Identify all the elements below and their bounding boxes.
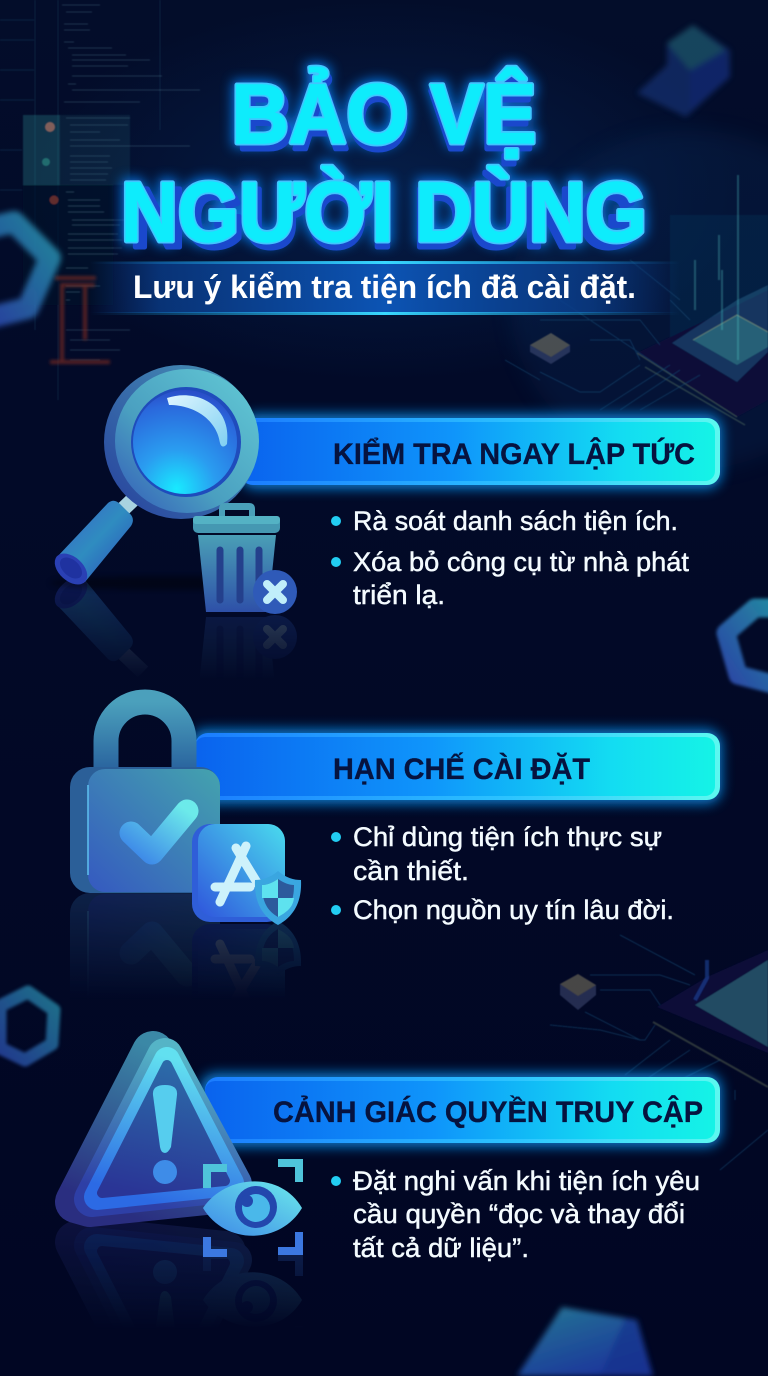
bullet list [331,506,690,610]
banner [190,729,722,804]
panel: cảnh giác quyền truy cập [76,1052,722,1376]
bullet list: triển lạ. [353,580,445,610]
title glow: NGƯỜI DÙNG [121,165,647,259]
decoration: left hexagon top [0,222,50,318]
decoration: top-right cube [637,25,730,117]
bullet list: Xóa bỏ công cụ từ nhà phát [353,547,690,577]
bullet list: Đặt nghi vấn khi tiện ích yêu [353,1166,700,1196]
icon: warning triangle [76,1052,234,1206]
title extrusion: NGƯỜI DÙNG [130,171,638,265]
title glow: BẢO VỆ [232,67,536,161]
title face: NGƯỜI DÙNG [121,165,647,259]
heading: HẠN CHẾ CÀI ĐẶT [333,752,590,786]
banner [200,1073,722,1147]
decoration: bottom cube [517,1307,653,1376]
title face: BẢO VỆ [232,67,536,161]
title face [121,67,647,259]
title outline [121,67,647,259]
bullet list: tất cả dữ liệu”. [353,1233,529,1263]
background: red code glow [50,278,110,362]
background: circuit board and chip top [505,175,768,425]
bullet list [331,822,674,925]
bullet list: cầu quyền “đọc và thay đổi [353,1199,685,1229]
decoration: left hexagon bottom [0,992,54,1060]
subtitle band [90,261,680,315]
icon: eye scan [203,1163,302,1253]
heading: CẢNH GIÁC QUYỀN TRUY CẬP [273,1095,703,1129]
title extrusion: BẢO VỆ [237,73,533,167]
title outline: NGƯỜI DÙNG [121,165,647,259]
bullet list: cần thiết. [353,856,469,886]
title glow [121,67,647,259]
title [121,67,647,265]
icon: shield [255,871,301,925]
heading: KIỂM TRA NGAY LẬP TỨC [333,437,695,471]
icon: app store [192,824,301,925]
icon: padlock [70,702,220,893]
banner [240,414,722,489]
title outline: BẢO VỆ [232,67,536,161]
subtitle: Lưu ý kiểm tra tiện ích đã cài đặt. [133,269,636,305]
panel: kiểm tra ngay [49,365,722,726]
decoration: right hexagon [726,608,768,686]
title extrusion [130,73,638,265]
bullet list: Chỉ dùng tiện ích thực sự [353,822,662,852]
icon: trash bin [193,503,297,614]
icon: magnifier [49,365,290,591]
panel: hạn chế cài đặt [70,702,722,1084]
background: circuit board and chip bottom [550,935,768,1170]
icon reflection: magnifier and bin [54,581,297,666]
icon reflection: lock and app [70,893,301,986]
background: code panels [0,0,200,400]
bullet list: Chọn nguồn uy tín lâu đời. [353,895,674,925]
bullet list [331,1166,700,1263]
bullet list: Rà soát danh sách tiện ích. [353,506,678,536]
icon reflection: warning and eye [55,1222,303,1314]
